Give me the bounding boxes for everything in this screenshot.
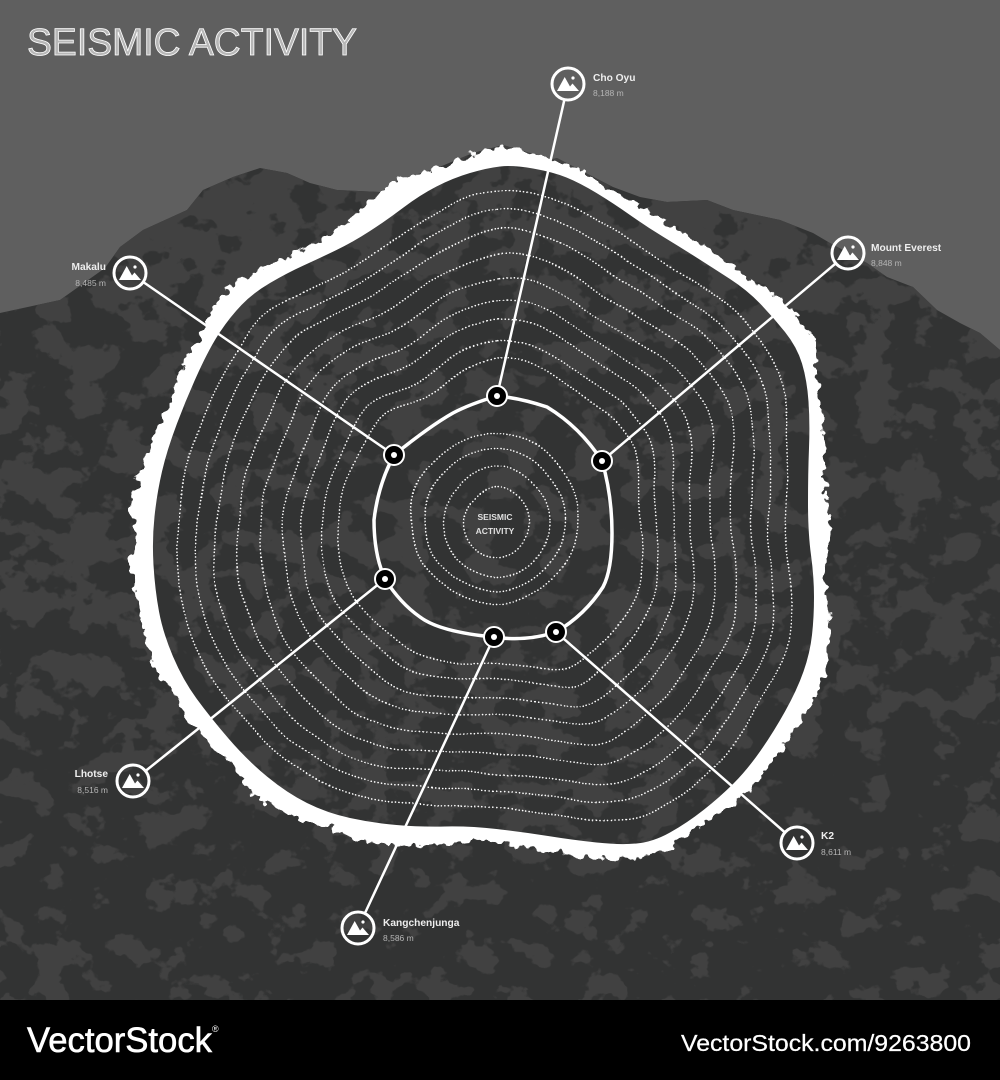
centre label: [476, 512, 515, 536]
thick ragged outer ring: [130, 145, 830, 860]
title: SEISMIC ACTIVITY: [27, 22, 357, 64]
peak: Kangchenjunga: Kangchenjunga: [383, 918, 460, 929]
centre label: SEISMIC: [478, 512, 512, 522]
peak: Mount Everest: 8,848 m: [871, 258, 902, 268]
peak: K2: [781, 827, 851, 859]
peak: Kangchenjunga: 8,586 m: [383, 933, 414, 943]
watermark bar: ®: [212, 1024, 219, 1034]
core nodes: [375, 386, 612, 647]
watermark bar: VectorStock: [27, 1021, 212, 1060]
peak: Mount Everest: Mount Everest: [871, 243, 942, 254]
inner core ring: [374, 396, 612, 639]
peak: Lhotse: [75, 765, 149, 797]
watermark bar: [0, 1000, 1000, 1080]
mountain silhouette with mottled texture: [0, 145, 1000, 1000]
peak: Cho Oyu: [552, 68, 635, 100]
peak: Lhotse: 8,516 m: [77, 785, 108, 795]
peak: Kangchenjunga: [342, 912, 460, 944]
watermark bar: VectorStock.com/9263800: [681, 1030, 971, 1056]
connector lines from core to peaks: [143, 100, 836, 914]
peak: Cho Oyu: Cho Oyu: [593, 73, 635, 84]
peak: Lhotse: Lhotse: [75, 769, 108, 780]
centre label: ACTIVITY: [476, 526, 515, 536]
peak: Mount Everest: [832, 237, 942, 269]
peak: K2: 8,611 m: [821, 847, 851, 857]
peak: K2: K2: [821, 831, 834, 842]
peak: Makalu: 8,485 m: [75, 278, 106, 288]
peak: Cho Oyu: 8,188 m: [593, 88, 624, 98]
dotted tremor rings: [177, 191, 792, 822]
peak: Makalu: [71, 257, 146, 289]
peak: Makalu: Makalu: [71, 262, 106, 273]
